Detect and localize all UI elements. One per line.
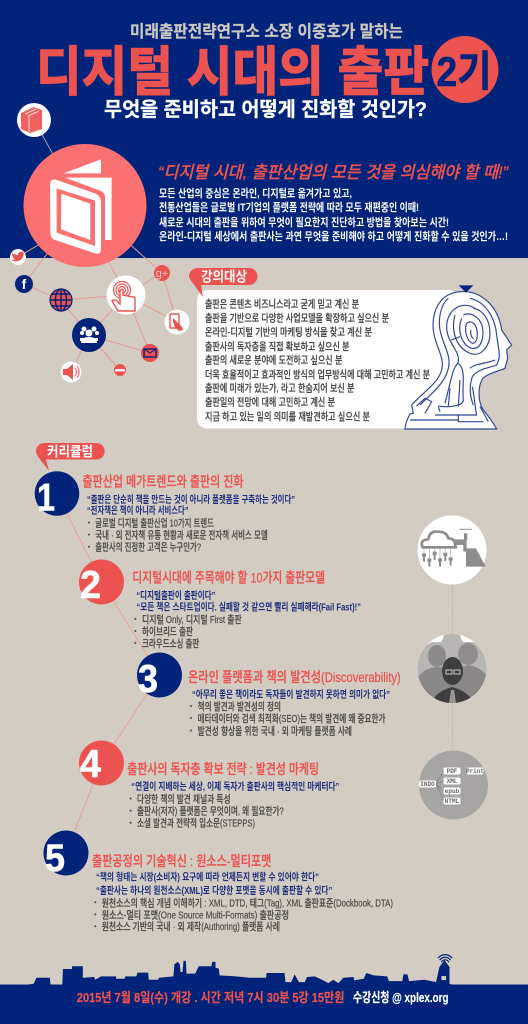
bullets 1 xyxy=(88,516,268,554)
footer text: 2015년 7월 8일(수) 개강 . 시간 저녁 7시 30분 5강 15만원 xyxy=(77,990,344,1005)
icon: people group xyxy=(72,318,106,352)
intro text xyxy=(159,186,508,243)
icon: touch hand xyxy=(106,276,146,314)
section 1 xyxy=(35,471,295,554)
intro text: 모든 산업의 중심은 온라인, 디지털로 옮겨가고 있고, xyxy=(159,186,352,200)
quotes 2: “디지털출판이 출판이다” xyxy=(136,589,215,602)
number 3: 3 xyxy=(138,658,158,701)
icon: facebook xyxy=(15,275,33,293)
quote 4: “연결이 지배하는 세상, 이제 독자가 출판사의 핵심적인 마케터다” xyxy=(131,780,339,793)
heading 4: 출판사의 독자층 확보 전략 : 발견성 마케팅 xyxy=(127,761,319,777)
section 3 xyxy=(137,652,401,738)
icon: stacked books xyxy=(17,103,51,137)
tag: curriculum: 커리큘럼 xyxy=(47,444,93,460)
panel: audience xyxy=(189,268,459,428)
audience list: 온라인-디지털 기반의 마케팅 방식을 찾고 계신 분 xyxy=(205,326,372,339)
bullets 3 xyxy=(190,700,386,738)
icon: reader silhouettes xyxy=(418,634,486,703)
quotes 1 xyxy=(87,493,295,517)
bullets 1: 출판사의 진정한 고객은 누구인가? xyxy=(95,542,201,554)
subtitle: 무엇을 준비하고 어떻게 진화할 것인가? xyxy=(104,98,427,121)
title block xyxy=(36,22,498,121)
kicker line: 미래출판전략연구소 소장 이중호가 말하는 xyxy=(130,22,403,41)
icon: format diagram: PDF xyxy=(447,768,458,775)
bullets 1: 글로벌 디지털 출판산업 10가지 트렌드 xyxy=(95,516,214,530)
heading 5: 출판공정의 기술혁신 : 원소스-멀티포맷 xyxy=(92,853,271,869)
audience list: 출판을 기반으로 다양한 사업모델을 확장하고 싶으신 분 xyxy=(205,312,389,324)
bullets 4 xyxy=(130,792,284,830)
number 2 xyxy=(79,560,124,607)
bullets 5: 원천소스 기반의 국내 · 외 제작(Authoring) 플랫폼 사례 xyxy=(102,920,280,933)
bullets 3: 메타데이터와 검색 최적화(SEO)는 책의 발견에 왜 중요한가 xyxy=(198,712,386,725)
heading 3: 온라인 플랫폼과 책의 발견성(Discoverability) xyxy=(188,669,401,685)
number 5: 5 xyxy=(45,837,65,880)
timeline connector xyxy=(57,494,160,853)
intro text: 새로운 시대의 출판을 위하여 무엇이 필요한지 진단하고 방법을 찾아보는 시간! xyxy=(159,215,449,229)
audience list: 출판에 미래가 있는가, 라고 한숨지어 보신 분 xyxy=(205,383,355,395)
badge: 2nd term: 2기 xyxy=(436,48,492,95)
quotes 2: “모든 책은 스타트업이다. 실패할 것 같으면 빨리 실패해라(Fail Fast)!” xyxy=(136,601,361,614)
number 4 xyxy=(79,740,124,786)
bullets 3: 발견성 향상을 위한 국내 · 외 마케팅 플랫폼 사례 xyxy=(198,724,352,738)
audience list: 출판일의 전망에 대해 고민하고 계신 분 xyxy=(205,396,335,409)
footer text: 수강신청 @ xplex.org xyxy=(353,990,449,1005)
tag: audience: 강의대상 xyxy=(201,268,247,284)
skyline xyxy=(12,955,455,988)
number 2: 2 xyxy=(80,564,101,607)
number 5 xyxy=(44,830,88,880)
main title: 디지털 시대의 출판 xyxy=(36,43,429,102)
icon: cloud faucet xyxy=(418,516,486,584)
bullets 3: 책의 발견과 발견성의 정의 xyxy=(198,700,281,713)
icon: format diagram: Print xyxy=(466,768,484,775)
icon: maze head xyxy=(405,285,512,429)
icon: format diagram xyxy=(419,750,488,820)
header band xyxy=(0,0,528,258)
audience list: 출판의 새로운 분야에 도전하고 싶으신 분 xyxy=(205,354,343,367)
icon: format diagram: INDO xyxy=(420,781,435,788)
section 5 xyxy=(44,830,393,933)
footer band xyxy=(0,984,528,1024)
bullets 2: 하이브리드 출판 xyxy=(142,625,193,638)
icon: facebook: f xyxy=(22,276,27,292)
icon: twitter xyxy=(10,249,26,265)
icon: globe xyxy=(50,289,72,311)
bullets 4: 출판사(저자) 플랫폼은 무엇이며, 왜 필요한가? xyxy=(137,806,284,818)
quote 3: “아무리 좋은 책이라도 독자들이 발견하지 못하면 의미가 없다” xyxy=(192,688,390,701)
audience list: 출판은 콘텐츠 비즈니스라고 굳게 믿고 계신 분 xyxy=(205,297,359,310)
bullets 5: 원천소스의 핵심 개념 이해하기 : XML, DTD, 태그(Tag), XML 출판표준(Dockbook, DTA) xyxy=(102,896,393,909)
icon: speaker xyxy=(60,362,82,382)
icon: large open book xyxy=(24,144,146,267)
icon: google plus: g+ xyxy=(156,268,168,280)
icon: link xyxy=(114,364,126,376)
bullets 2: 디지털 Only, 디지털 First 출판 xyxy=(142,613,242,626)
network connector lines xyxy=(18,120,177,372)
icon: format diagram: HTML xyxy=(445,798,460,805)
quotes 5: “출판사는 하나의 원천소스(XML)로 다양한 포맷을 동시에 출판할 수 있다” xyxy=(96,884,332,897)
bullets 1: 국내 · 외 전자책 유통 현황과 새로운 전자책 서비스 모델 xyxy=(95,529,268,542)
quotes 1: “출판은 단순히 책을 만드는 것이 아니라 플랫폼을 구축하는 것이다” xyxy=(87,493,295,506)
number 4: 4 xyxy=(80,743,101,786)
audience list xyxy=(205,297,430,423)
right column connector xyxy=(452,585,454,750)
bullets 4: 소셜 발견과 전략적 입소문(STEPPS) xyxy=(137,817,255,830)
bullets 4: 다양한 책의 발견 채널과 특성 xyxy=(137,792,231,806)
quotes 5 xyxy=(96,870,332,897)
tag: audience xyxy=(189,268,258,297)
intro text: 전통산업들은 글로벌 IT기업의 플랫폼 전략에 따라 모두 재편중인 이때! xyxy=(159,200,419,214)
number 1: 1 xyxy=(37,476,55,520)
audience list: 지금 하고 있는 일의 의미를 재발견하고 싶으신 분 xyxy=(205,410,370,423)
number 1 xyxy=(35,471,79,520)
quotes 5: “책의 형태는 시장(소비자) 요구에 따라 언제든지 변할 수 있어야 한다” xyxy=(96,870,319,883)
badge: 2nd term xyxy=(432,36,498,103)
section 2 xyxy=(79,560,361,650)
icon: format diagram: XML xyxy=(447,778,458,785)
icon: google plus xyxy=(154,265,170,281)
audience list: 출판사의 독자층을 직접 확보하고 싶으신 분 xyxy=(205,340,350,353)
audience list: 더욱 효율적이고 효과적인 방식의 업무방식에 대해 고민하고 계신 분 xyxy=(205,368,430,381)
quotes 2 xyxy=(136,589,361,614)
icon: format diagram: epub xyxy=(445,788,460,795)
tag: curriculum xyxy=(36,443,105,471)
icon: tablet touch xyxy=(164,310,190,334)
number 3 xyxy=(137,652,182,701)
section 4 xyxy=(79,740,339,830)
heading 2: 디지털시대에 주목해야 할 10가지 출판모델 xyxy=(132,569,325,585)
heading 1: 출판산업 메가트렌드와 출판의 진화 xyxy=(82,473,244,489)
bullets 5: 원소스-멀티 포맷(One Source Multi-Formats) 출판공정 xyxy=(102,908,289,921)
icon: mail xyxy=(141,344,159,362)
bullets 5 xyxy=(94,896,393,933)
intro quote: “디지털 시대, 출판산업의 모든 것을 의심해야 할 때!” xyxy=(158,163,509,182)
quotes 1: “전자책은 책이 아니라 서비스다” xyxy=(87,504,188,517)
bullets 2 xyxy=(134,613,242,650)
bullets 2: 크라우드소싱 출판 xyxy=(142,638,200,650)
